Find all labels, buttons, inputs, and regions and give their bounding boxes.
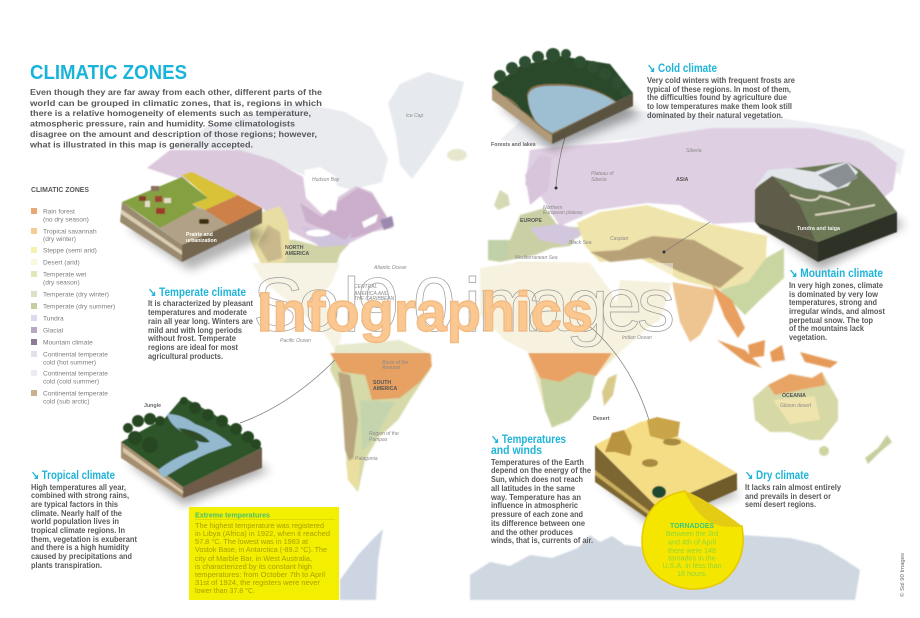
legend: Temperate (dry summer): [43, 304, 115, 310]
eurasia tundra: [500, 108, 905, 175]
callout: tornadoes: U.S.A. in less than: [662, 561, 722, 570]
indonesia: [717, 340, 762, 368]
map labels: AMERICA AND: [353, 291, 389, 297]
text: tropical climate: caused by precipitations and: [31, 552, 132, 561]
legend title: CLIMATIC ZONES: [31, 187, 89, 194]
callout: extreme temperatures: is characterized by its constant high: [195, 562, 312, 571]
map labels: Siberia: [591, 177, 607, 183]
heading: mountain climate: ↘ Mountain climate: [789, 266, 883, 280]
text: mountain climate: irregular winds, and almost: [789, 307, 885, 316]
text: cold climate: Very cold winters with frequent frosts are: [647, 76, 796, 85]
intro text: there is a relative homogeneity of elements such as temperature,: [30, 109, 311, 118]
text: temperate climate: without frost. Temperate: [147, 334, 237, 343]
map labels: Ice Cap: [406, 113, 423, 119]
text: cold climate: typical of these regions. In most of them,: [647, 85, 791, 94]
legend: [31, 187, 115, 406]
text: temperatures and winds: all latitudes in the same: [491, 484, 576, 493]
map labels: [280, 113, 812, 462]
label: jungle: Jungle: [144, 403, 161, 409]
map labels: NORTH: [285, 245, 304, 251]
callout: tornadoes: tornados in the: [668, 554, 716, 562]
north america: [147, 103, 394, 352]
heading: temperatures and winds: ↘ Temperatures: [491, 432, 566, 446]
legend: Continental temperate: [43, 352, 108, 358]
text: cold climate: dominated by their natural vegetation.: [647, 111, 783, 120]
legend: Desert (arid): [43, 260, 80, 266]
map labels: Atlantic Ocean: [373, 265, 407, 271]
text: dry climate: [745, 483, 842, 509]
heading: dry climate: ↘ Dry climate: [745, 468, 809, 482]
text: temperate climate: mild and with long periods: [148, 326, 243, 335]
block: prairie and urbanization: urbanization: [186, 238, 217, 244]
heading: cold climate: ↘ Cold climate: [647, 61, 717, 75]
text: temperatures and winds: way. Temperature has an: [490, 493, 581, 502]
intro text: what is illustrated in this map is generally accepted.: [29, 140, 253, 150]
block: mountain: [755, 162, 905, 270]
text: dry climate: and prevails in desert or: [745, 492, 831, 501]
heading: temperatures and winds: [491, 432, 566, 457]
text: mountain climate: perpetual snow. The top: [789, 316, 873, 325]
legend: Tropical savannah: [43, 228, 97, 236]
callout heading: TORNADOES: [670, 521, 714, 530]
watermark: Infographics: Infographics: [257, 280, 593, 343]
legend: Mountain climate: [43, 340, 93, 346]
title: CLIMATIC ZONES: [30, 62, 187, 84]
world map: [147, 72, 905, 618]
map labels: Patagonia: [355, 456, 378, 462]
callout: extreme temperatures: 57.8 °C. The lowest was in 1983 at: [195, 537, 308, 546]
heading: tropical climate: ↘ Tropical climate: [31, 468, 115, 482]
central asia: [577, 205, 767, 290]
map labels: AMERICA: [285, 251, 309, 257]
text: mountain climate: [789, 281, 885, 342]
text: tropical climate: High temperatures all year,: [31, 483, 126, 492]
map labels: Region of the: [369, 431, 399, 437]
text: temperatures and winds: depend on the energy of the: [491, 466, 592, 475]
text: temperatures and winds: its difference between one: [491, 519, 586, 528]
text: mountain climate: temperatures, strong and: [789, 298, 877, 307]
map labels: European plateau: [543, 210, 583, 216]
legend: (dry season): [43, 280, 80, 286]
text: tropical climate: climate. Nearly half of the: [31, 509, 123, 518]
map labels: Mediterranean Sea: [515, 255, 558, 261]
heading: temperatures and winds: and winds: [491, 443, 542, 457]
callout: tornadoes: 18 hours.: [677, 569, 707, 578]
russia purple: [525, 128, 897, 226]
map labels: Siberia: [686, 148, 702, 154]
text: tropical climate: combined with strong rains,: [31, 491, 129, 500]
map labels: Gibson desert: [780, 403, 812, 409]
text: temperatures and winds: Temperatures of the Earth: [491, 458, 584, 467]
map labels: THE CARIBBEAN: [354, 296, 395, 302]
map labels: AMERICA: [373, 386, 397, 392]
text: dry climate: semi desert regions.: [745, 500, 816, 509]
legend: Steppe (semi arid): [43, 248, 97, 254]
block label: Tundra and taiga: [797, 226, 841, 232]
south america: [330, 340, 432, 492]
legend: Tundra: [43, 316, 64, 322]
block label: Prairie and: [186, 232, 213, 238]
map labels: SOUTH: [373, 380, 391, 386]
callout: extreme temperatures: in Libya (Africa) in 1922, when it reached: [195, 529, 330, 538]
legend: Glacial: [43, 328, 64, 334]
text: temperate climate: regions are ideal for most: [148, 343, 238, 352]
text: tropical climate: world population lives in: [30, 517, 119, 526]
text: tropical climate: are typical factors in this: [31, 500, 119, 509]
callout: extreme temperatures: The highest temperature was registered: [195, 521, 324, 530]
legend: Temperate (dry winter): [43, 292, 109, 298]
callout: extreme temperatures: temperatures: from October 7th to April: [195, 570, 325, 579]
legend: cold (sub arctic): [43, 398, 90, 406]
text: temperatures and winds: [490, 458, 593, 545]
text: tropical climate: tropical climate regions. In: [31, 526, 125, 535]
legend: (no dry season): [43, 216, 89, 224]
text: temperate climate: rain all year long. Winters are: [148, 317, 254, 326]
callout: extreme temperatures: [189, 507, 339, 600]
block: prairie and urbanization: [120, 172, 268, 270]
legend: Continental temperate: [43, 370, 108, 378]
map labels: Amazon: [381, 365, 401, 371]
map labels: Northern: [543, 205, 563, 211]
text: tropical climate: plants transpiration.: [31, 561, 102, 570]
translucent band: [250, 263, 673, 353]
watermark: Sol90images: Sol90images: [253, 263, 675, 348]
credit: © Sol 90 Images: [899, 553, 906, 597]
callout heading: Extreme temperatures: [195, 510, 270, 520]
legend: Continental temperate: [43, 390, 108, 398]
map labels: Pampas: [369, 437, 388, 443]
callout: tornadoes: Between the 3rd: [666, 529, 718, 538]
leader lines: [240, 130, 773, 423]
map labels: CENTRAL: [354, 284, 378, 290]
map labels: Indian Ocean: [622, 335, 652, 341]
callout: tornadoes: [642, 491, 743, 589]
map labels: EUROPE: [520, 218, 542, 224]
map labels: Hudson Bay: [312, 177, 340, 183]
block: jungle: [121, 397, 270, 505]
text: mountain climate: is dominated by very low: [789, 290, 879, 299]
callout: tornadoes: there were 148: [668, 546, 716, 555]
intro text: disagree on the amount and description of those regions; however,: [30, 130, 317, 139]
text: temperate climate: It is characterized by pleasant: [148, 299, 253, 308]
callout: extreme temperatures: lower than 37.8 °C.: [195, 586, 255, 595]
antarctica: [470, 535, 860, 600]
europe: [488, 208, 588, 262]
legend: cold (hot summer): [43, 360, 96, 366]
text: temperate climate: temperatures and moderate: [148, 308, 248, 317]
africa: [480, 262, 646, 428]
greenland: [388, 72, 464, 179]
legend: Temperate wet: [43, 272, 86, 278]
label: forests and lakes: Forests and lakes: [491, 142, 536, 148]
text: tropical climate: [30, 483, 137, 570]
intro text: world can be grouped in climatic zones, that is, regions in which: [29, 99, 322, 108]
intro text: [29, 88, 323, 150]
sticker curl: [685, 491, 742, 527]
map labels: ASIA: [676, 177, 689, 183]
text: temperatures and winds: and the other produces: [491, 528, 574, 537]
text: temperatures and winds: pressure of each zone and: [491, 510, 583, 519]
legend: cold (cold summer): [43, 378, 99, 386]
callout: extreme temperatures: city of Marble Bar, in West Australia,: [195, 554, 312, 563]
intro text: Even though they are far away from each other, different parts of the: [30, 88, 323, 97]
block: desert: [595, 417, 740, 525]
india and south east asia: [672, 282, 716, 342]
text: cold climate: the difficulties found by agriculture due: [647, 93, 788, 102]
text: temperatures and winds: Sun, which does not reach: [491, 475, 583, 484]
text: dry climate: It lacks rain almost entirely: [745, 483, 842, 492]
legend: Rain forest: [43, 208, 75, 216]
map labels: Caspian: [610, 236, 629, 242]
text: mountain climate: vegetation.: [789, 333, 827, 342]
map labels: Black Sea: [569, 240, 592, 246]
map labels: Basin of the: [382, 360, 409, 366]
text: mountain climate: In very high zones, climate: [789, 281, 884, 290]
map labels: Pacific Ocean: [280, 338, 311, 344]
text: temperatures and winds: winds, that is, currents of air.: [490, 536, 593, 545]
map labels: Plateau of: [591, 171, 614, 177]
block: forests and lakes: [492, 48, 640, 150]
label: desert: Desert: [593, 416, 610, 422]
text: temperatures and winds: influence in atmospheric: [491, 501, 579, 510]
callout: extreme temperatures: Vostok Base, in Antarctica (-89.2 °C). The: [195, 545, 327, 554]
callout: extreme temperatures: 31st of 1924, the registers were never: [195, 578, 321, 587]
australia: [753, 372, 838, 440]
callout: tornadoes: and 4th of April: [668, 538, 716, 546]
map labels: OCEANIA: [782, 393, 806, 399]
text: cold climate: to low temperatures make them look still: [647, 102, 792, 111]
text: temperate climate: agricultural products.: [148, 352, 223, 361]
heading: temperate climate: ↘ Temperate climate: [148, 285, 246, 299]
text: cold climate: [647, 76, 796, 120]
legend: (dry winter): [43, 236, 76, 243]
text: mountain climate: of the mountains lack: [789, 324, 865, 333]
text: temperate climate: [147, 299, 254, 361]
text: tropical climate: and there is a high humidity: [31, 543, 130, 552]
intro text: atmospheric pressure, rain and humidity. Some climatologists: [30, 120, 296, 128]
text: tropical climate: them, vegetation is exuberant: [31, 535, 137, 544]
